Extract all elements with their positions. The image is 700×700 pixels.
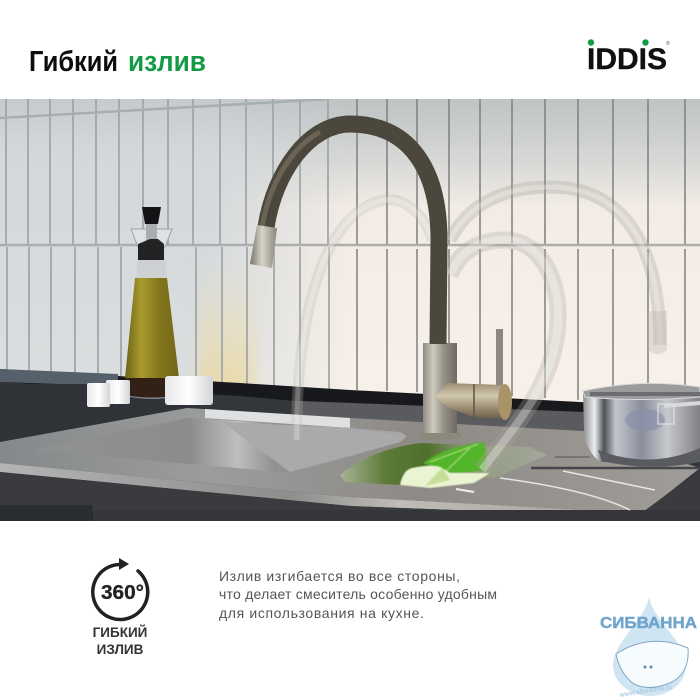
icon label: ГИБКИЙ xyxy=(93,625,147,640)
flexible spout hose xyxy=(266,124,439,344)
brand logo: IDDIS: ® xyxy=(666,40,670,47)
water drop xyxy=(613,597,686,696)
icon label xyxy=(93,625,147,657)
icon label: ИЗЛИВ xyxy=(97,642,144,657)
drainer grooves xyxy=(500,478,630,510)
watermark: Sibvanna: www.sibvanna.ru xyxy=(618,684,673,699)
white cups xyxy=(87,376,213,407)
hose highlight xyxy=(262,132,320,227)
watermark: Sibvanna xyxy=(600,597,697,699)
lettuce xyxy=(400,442,490,488)
description text: что делает смеситель особенно удобным xyxy=(219,586,497,602)
watermark: Sibvanna: СИБВАННА xyxy=(600,615,697,632)
left basin xyxy=(140,418,405,470)
brand logo: IDDIS: IDDIS xyxy=(587,43,667,76)
countertop xyxy=(0,369,700,521)
sink deck and basins xyxy=(0,408,700,521)
small green basin xyxy=(340,443,547,485)
description text: Излив изгибается во все стороны, xyxy=(219,568,460,584)
bathtub xyxy=(616,641,688,688)
ghost spout positions xyxy=(297,187,667,470)
faucet base xyxy=(423,343,457,433)
cooking pot xyxy=(583,383,700,467)
mixer body xyxy=(434,383,505,419)
title xyxy=(29,46,206,78)
title: Гибкий xyxy=(29,46,118,78)
steel nozzle xyxy=(250,225,277,268)
tiled wall xyxy=(0,99,700,419)
photo: kitchen sink with flexible faucet xyxy=(0,99,700,521)
lever handle xyxy=(496,329,503,387)
description text: для использования на кухне. xyxy=(219,605,424,621)
icon: 360 degree rotation: 360° xyxy=(101,582,144,604)
icon: 360 degree rotation xyxy=(93,558,148,619)
faucet xyxy=(250,124,512,440)
title: излив xyxy=(128,46,206,78)
description text xyxy=(219,568,497,621)
oil bottle xyxy=(125,207,179,399)
